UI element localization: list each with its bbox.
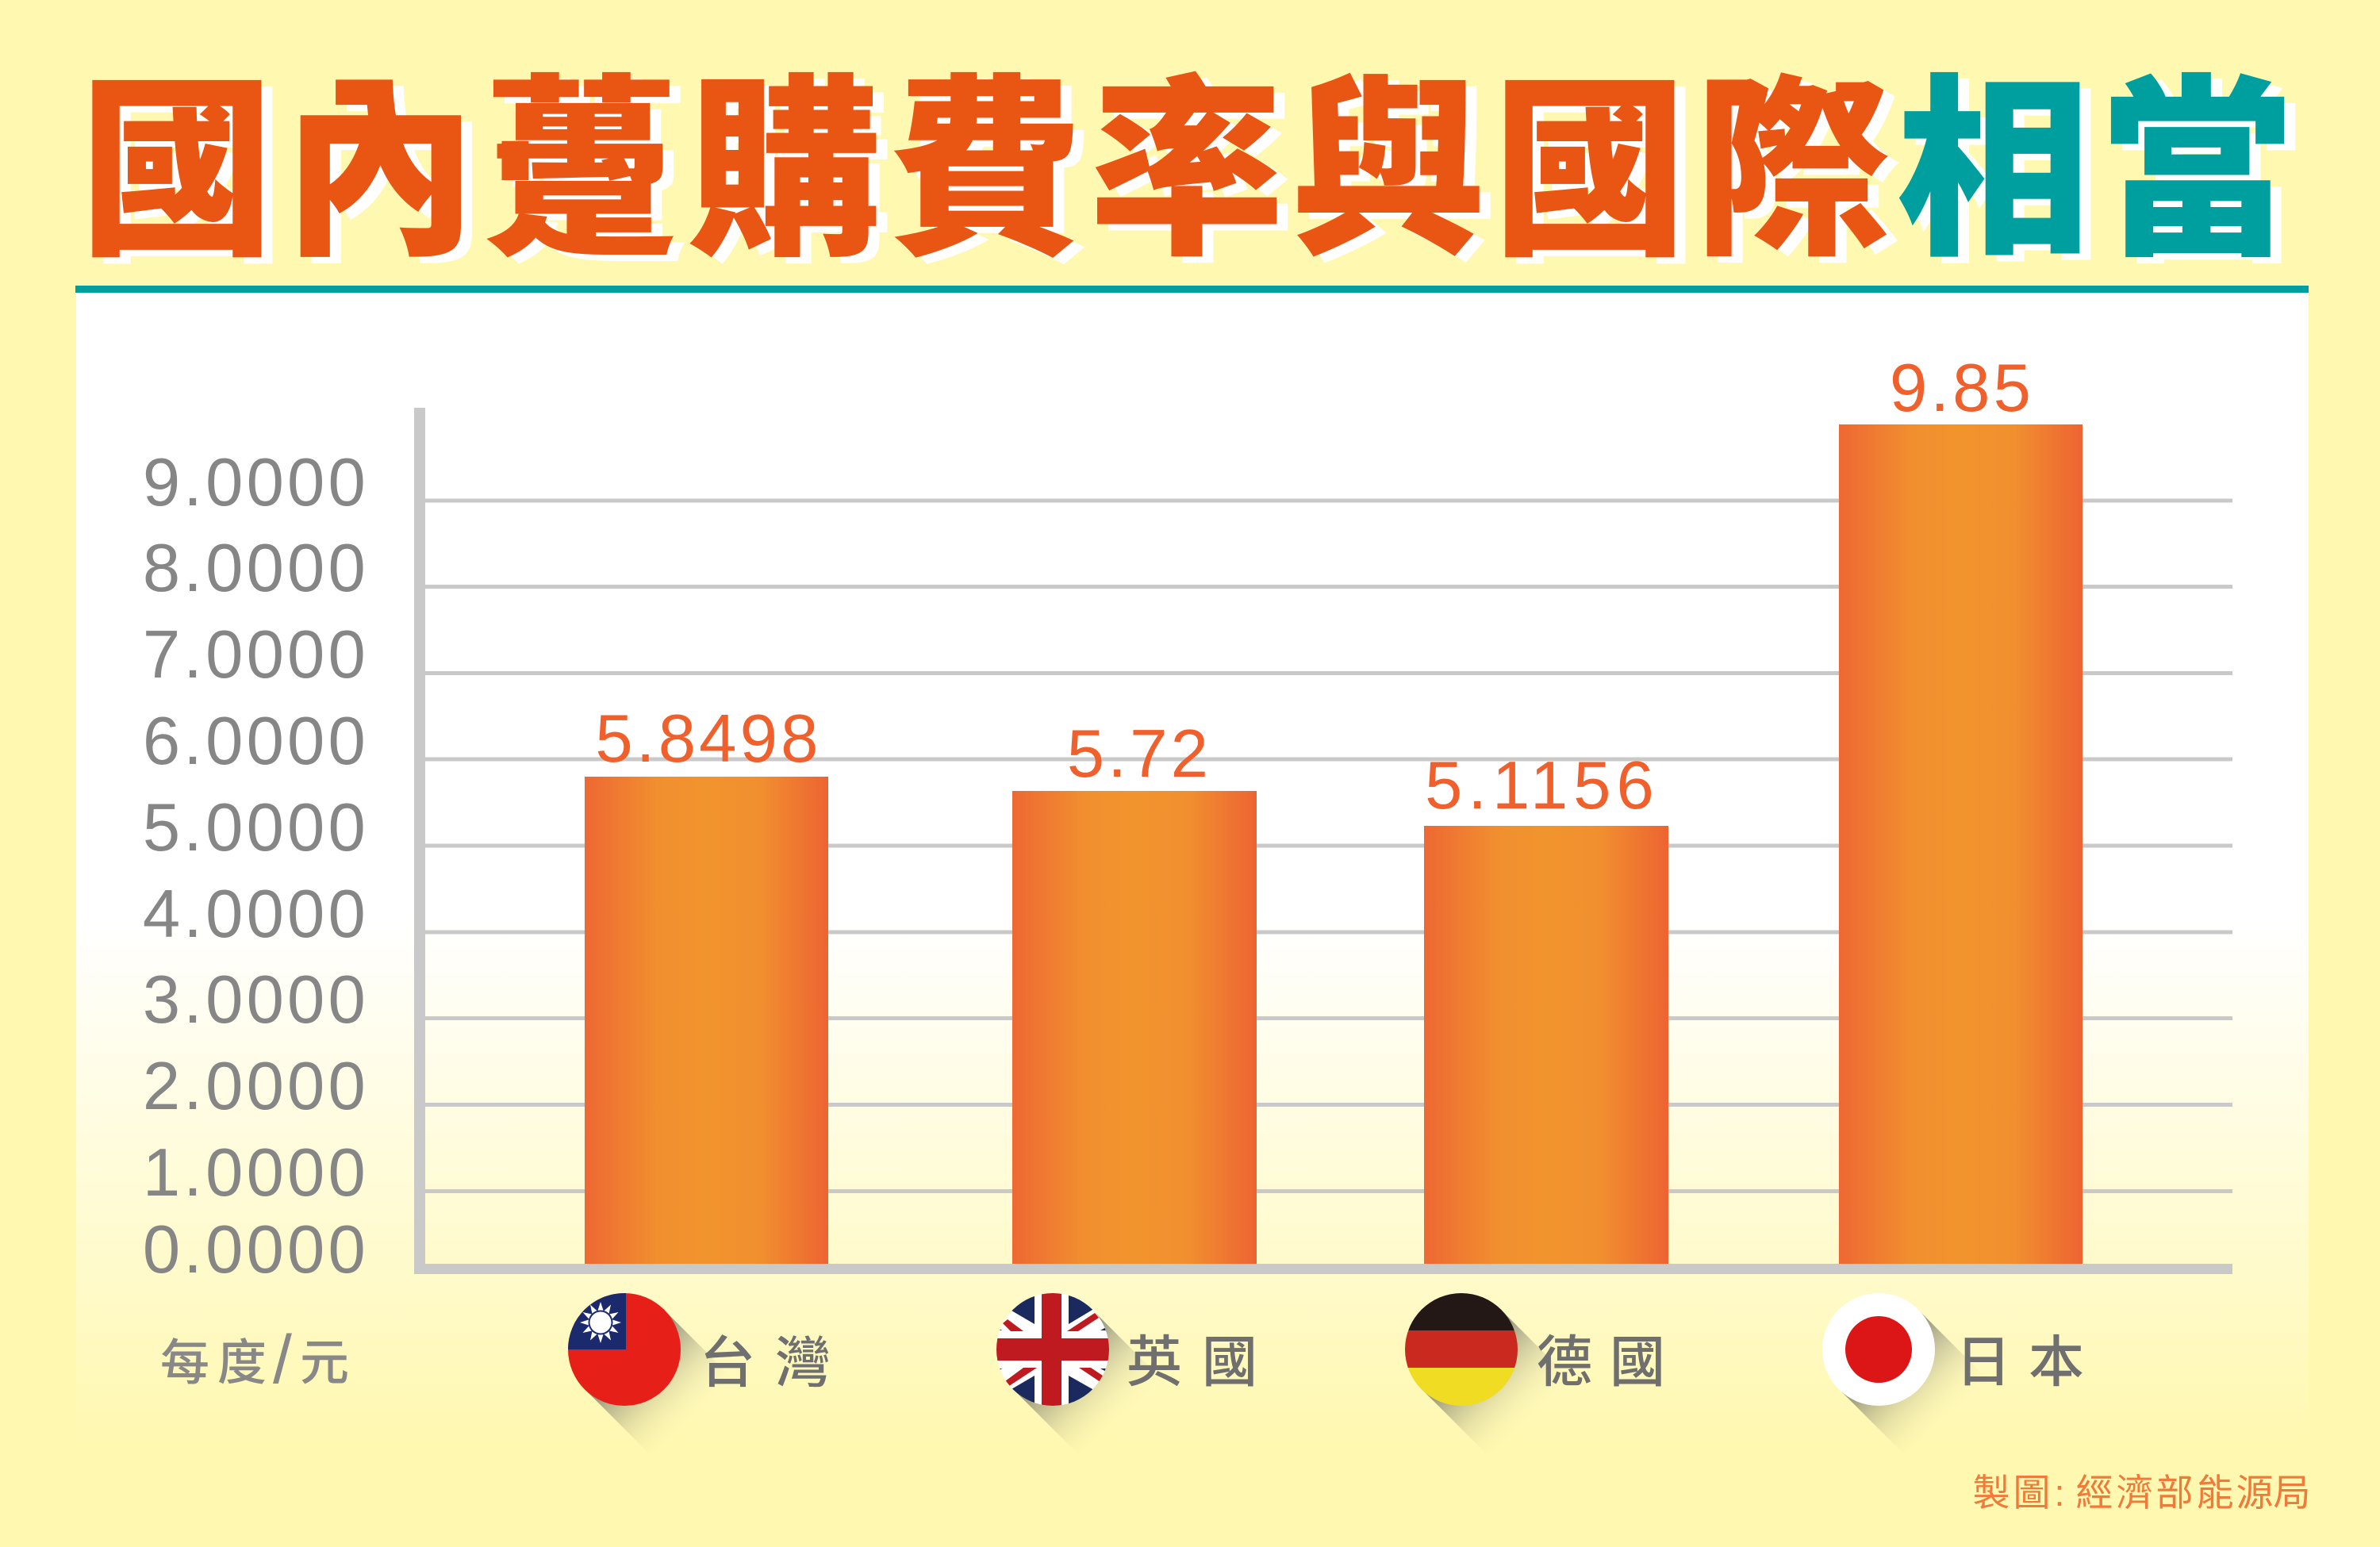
y axis labels: 2.0000 bbox=[143, 1049, 369, 1124]
bar: Taiwan bbox=[585, 777, 828, 1264]
y axis bbox=[414, 408, 425, 1274]
panel: chart background bbox=[76, 293, 2309, 1451]
label: Taiwan: 台 bbox=[700, 1332, 755, 1394]
y axis labels: 0.0000 bbox=[143, 1212, 369, 1288]
label: Taiwan bbox=[700, 1332, 831, 1394]
label: Germany bbox=[1537, 1331, 1665, 1393]
title divider bar bbox=[75, 286, 2309, 293]
y axis labels: 8.0000 bbox=[143, 531, 369, 606]
y axis labels: 1.0000 bbox=[143, 1135, 369, 1211]
label: UK: 國 bbox=[1202, 1331, 1257, 1393]
icon: UK flag bbox=[996, 1293, 1146, 1442]
gridlines bbox=[420, 498, 2232, 1193]
value: UK: 5.72 bbox=[1067, 716, 1211, 792]
label: Germany: 德 bbox=[1537, 1331, 1592, 1393]
y axis labels: 5.0000 bbox=[143, 790, 369, 866]
unit label: 元 bbox=[300, 1336, 349, 1391]
icon: Germany flag bbox=[1405, 1293, 1555, 1442]
x axis bbox=[414, 1264, 2232, 1274]
source credit: 製圖:經濟部能源局 bbox=[1972, 1472, 2310, 1514]
y axis labels: 3.0000 bbox=[143, 962, 369, 1038]
bar chart bbox=[143, 351, 2232, 1288]
label: Germany: 國 bbox=[1610, 1331, 1665, 1393]
icon: Japan flag bbox=[1822, 1293, 2077, 1547]
y axis labels: 6.0000 bbox=[143, 704, 369, 779]
bar: Germany bbox=[1424, 826, 1668, 1264]
label: Japan bbox=[1956, 1331, 2084, 1393]
bar: UK bbox=[1012, 791, 1257, 1264]
title orange text: 國內躉購費率與國際 bbox=[80, 63, 1890, 279]
label: UK: 英 bbox=[1127, 1331, 1182, 1393]
value: Japan: 9.85 bbox=[1890, 351, 2034, 426]
y axis labels: 7.0000 bbox=[143, 617, 369, 693]
title shadow: 國內躉購費率與國際相當 bbox=[91, 69, 2305, 286]
unit label: 度 bbox=[217, 1336, 267, 1391]
icon: Taiwan flag bbox=[568, 1293, 717, 1442]
value: Taiwan: 5.8498 bbox=[595, 701, 822, 777]
value: Germany: 5.1156 bbox=[1425, 748, 1660, 823]
unit label bbox=[160, 1322, 349, 1398]
label: Taiwan: 灣 bbox=[775, 1332, 831, 1394]
unit label: 每 bbox=[160, 1336, 209, 1391]
y axis labels: 9.0000 bbox=[143, 445, 369, 520]
y axis labels bbox=[143, 445, 369, 1288]
label: UK bbox=[1127, 1331, 1257, 1393]
label: Japan: 日 bbox=[1956, 1331, 2011, 1393]
unit label: / bbox=[273, 1322, 292, 1398]
title bbox=[80, 63, 2305, 286]
title teal text: 相當 bbox=[1897, 63, 2294, 279]
bar: Japan bbox=[1839, 424, 2082, 1264]
label: Japan: 本 bbox=[2029, 1331, 2084, 1393]
y axis labels: 4.0000 bbox=[143, 877, 369, 952]
